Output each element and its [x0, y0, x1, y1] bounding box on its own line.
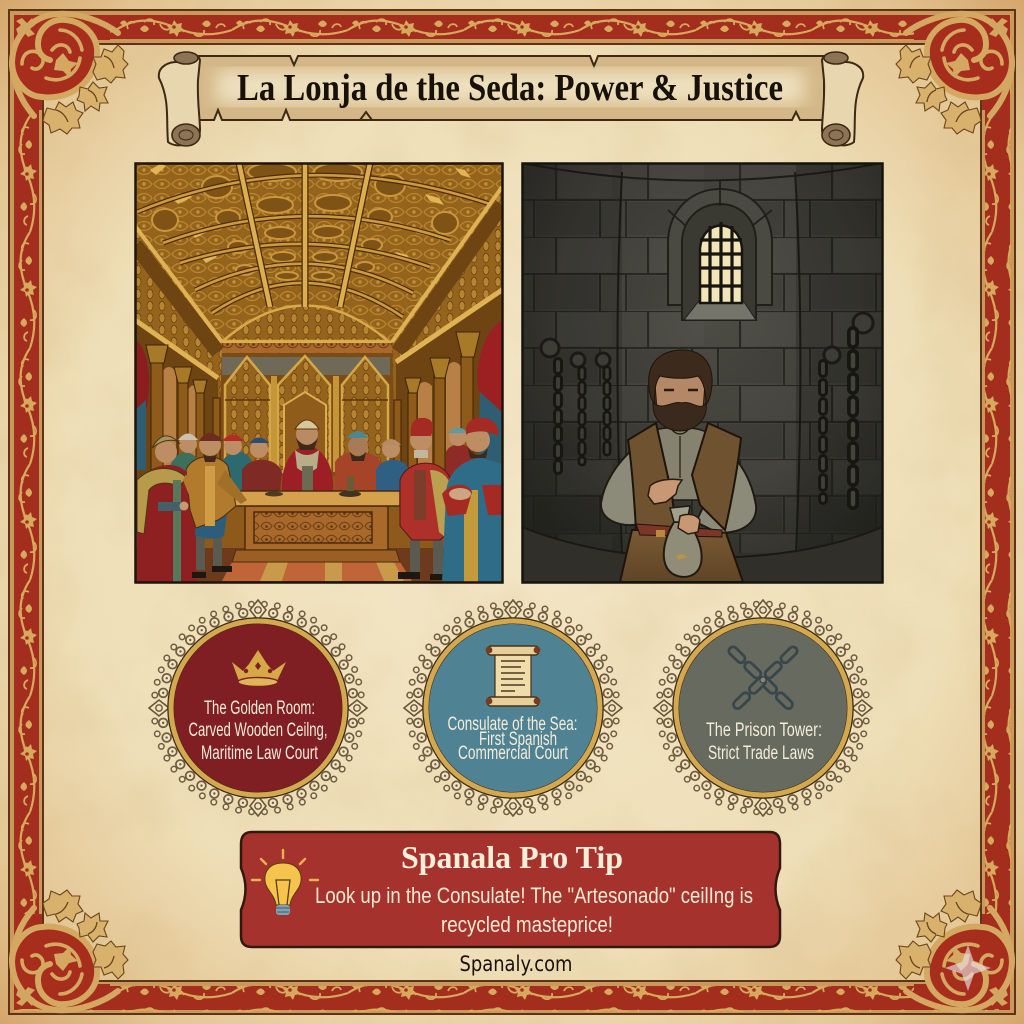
seated central magistrate [282, 420, 333, 492]
wall chains right [823, 313, 873, 512]
medallion text: First Spanish [479, 729, 557, 750]
imprisoned merchant [601, 350, 756, 582]
wall chains left [541, 339, 610, 470]
medallion text: Strict Trade Laws [708, 743, 814, 764]
head [655, 376, 705, 406]
lower robe [620, 530, 743, 582]
hands [648, 479, 682, 504]
medallion text: The Prison Tower: [706, 720, 822, 741]
medallion: golden room [149, 600, 367, 816]
panel: prison cell illustration [522, 163, 882, 582]
red and blue curtains [135, 320, 502, 470]
medallion: prison tower [654, 600, 872, 816]
footer site name: Spanaly.com [460, 952, 572, 976]
golden room image frame [136, 164, 502, 582]
medallion text: Consulate of the Sea: [448, 714, 578, 735]
vaulted coffered ceiling [135, 163, 502, 342]
banner body [196, 56, 824, 120]
tip text [315, 883, 753, 937]
back wall with arches [218, 341, 394, 476]
tip heading: Spanala Pro Tip [401, 839, 623, 875]
corner ornament: bottom right [896, 890, 1012, 1010]
side walls and columns [135, 187, 502, 480]
watermark sparkle [945, 945, 991, 991]
medallion text [448, 714, 578, 764]
right scroll curl [822, 52, 863, 146]
corner ornament: top right [896, 14, 1012, 134]
floor tiles [136, 548, 444, 582]
shirt [658, 427, 704, 501]
belt [636, 524, 722, 537]
title banner scroll [159, 52, 863, 146]
medallion text [188, 698, 328, 764]
corner ornament: bottom left [12, 890, 128, 1010]
medallion text: The Golden Room: [204, 698, 315, 719]
icon: parchment scroll [486, 646, 540, 706]
title: La Lonja de the Seda: Power & Justice [237, 67, 783, 109]
foreground figure: blue robed merchant right [442, 418, 502, 582]
stone block wall [522, 163, 882, 582]
medallion text [706, 720, 822, 764]
lunette [223, 306, 388, 341]
foreground figure: gold tunic merchant [183, 433, 247, 578]
foreground figure: red robed merchant right [398, 418, 454, 580]
panel: golden room illustration [135, 163, 502, 582]
arms [600, 452, 635, 526]
medallion text: Maritime Law Court [201, 743, 319, 764]
left scroll curl [159, 52, 200, 146]
back row of councillors [170, 428, 472, 490]
icon: crossed chains [732, 651, 794, 710]
corner ornament: top left [12, 14, 128, 134]
medallion text: Carved Wooden Ceilng, [188, 720, 328, 741]
medallion: consulate of the sea [404, 600, 622, 816]
barred arched window [668, 180, 772, 320]
icon: crown [232, 650, 286, 686]
money bag [664, 522, 702, 577]
callout: pro tip [241, 832, 780, 947]
prison image frame [522, 164, 882, 582]
icon: light bulb [252, 850, 318, 915]
council table [232, 476, 400, 562]
medallion text: Commercial Court [458, 743, 569, 764]
vest [628, 423, 676, 530]
tip text: recycled masteprice! [441, 912, 613, 937]
tip text: Look up in the Consulate! The "Artesonado" ceilIng is [315, 883, 753, 908]
foreground figure: red robed merchant left [137, 436, 197, 582]
